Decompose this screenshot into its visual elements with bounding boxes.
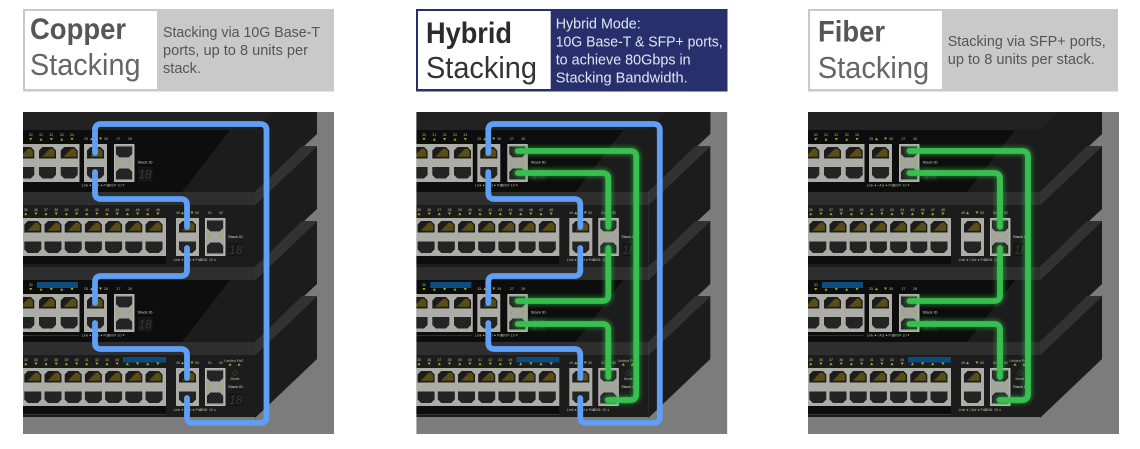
header: copper stacking: stack. xyxy=(163,60,201,77)
blue copper stacking cables xyxy=(95,124,266,423)
green fiber stacking cables xyxy=(518,151,636,400)
header: copper stacking: Stacking xyxy=(30,47,140,82)
header: hybrid stacking: to achieve 80Gbps in xyxy=(556,51,691,68)
header: copper stacking: Stacking via 10G Base-T xyxy=(163,24,320,41)
header: fiber stacking: Fiber xyxy=(818,16,885,49)
header: hybrid stacking: 10G Base-T & SFP+ ports, xyxy=(556,33,723,50)
green fiber stacking cables xyxy=(910,151,1028,400)
header: hybrid stacking: Hybrid xyxy=(426,17,512,50)
header: fiber stacking xyxy=(808,9,1118,92)
header: copper stacking: Copper xyxy=(30,13,126,46)
switch stack illustration: copper xyxy=(17,112,334,434)
panel: hybrid stacking xyxy=(411,9,728,434)
header: hybrid stacking: Stacking Bandwidth. xyxy=(556,69,688,86)
header: copper stacking xyxy=(23,9,334,92)
switch stack illustration: fiber xyxy=(802,112,1119,434)
header: hybrid stacking: Hybrid Mode: xyxy=(556,15,641,32)
switch stack illustration: hybrid xyxy=(411,112,727,434)
panel: fiber stacking xyxy=(802,9,1119,434)
blue copper stacking cables xyxy=(488,124,660,423)
header: hybrid stacking xyxy=(416,9,728,92)
header: fiber stacking: Stacking via SFP+ ports, xyxy=(948,33,1106,50)
header: hybrid stacking: Stacking xyxy=(426,50,537,85)
header: fiber stacking: up to 8 units per stack. xyxy=(948,51,1095,68)
header: copper stacking: ports, up to 8 units per xyxy=(163,42,308,59)
panel: copper stacking xyxy=(17,9,334,434)
header: fiber stacking: Stacking xyxy=(818,50,929,85)
